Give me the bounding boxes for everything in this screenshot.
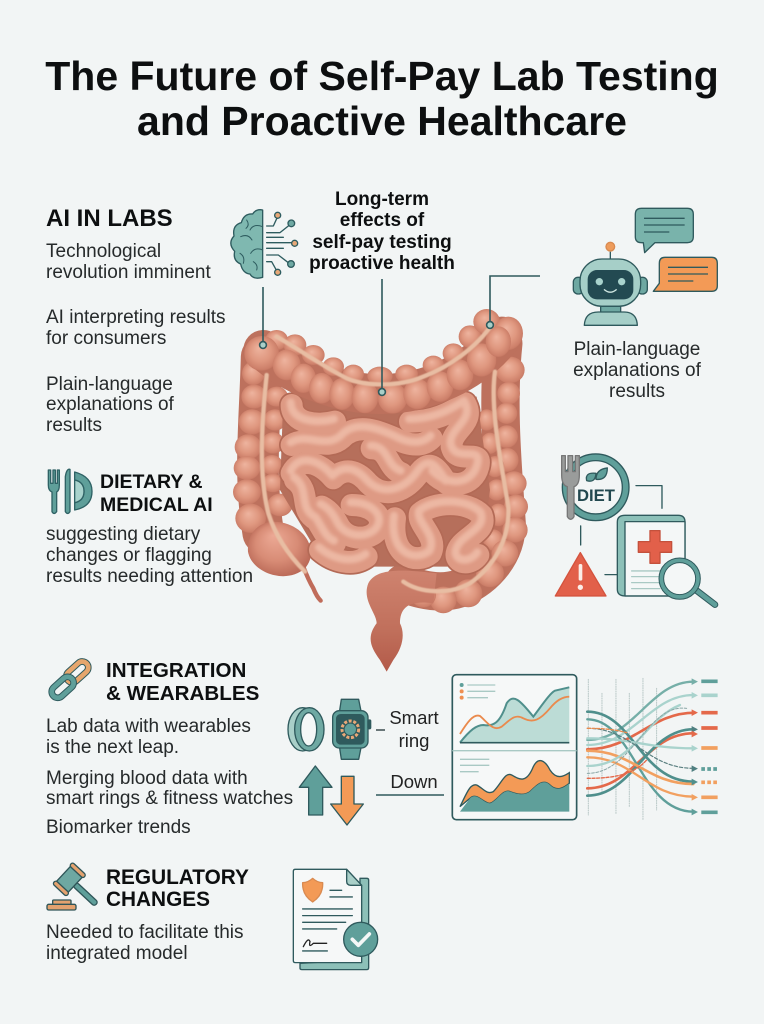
heading: dietary and medical AI: MEDICAL AI: [100, 494, 213, 516]
text: plain language: results: [46, 415, 102, 436]
ring: [288, 708, 324, 751]
text: regulatory body: Needed to facilitate this: [46, 922, 244, 943]
heading: AI in labs: AI IN LABS: [46, 205, 173, 232]
text: plain language: explanations of: [46, 394, 175, 415]
speech bubble teal: [635, 208, 693, 253]
chart panel: trend charts: [452, 675, 577, 820]
cecum and appendix: [248, 522, 321, 601]
callout lines with dots: [260, 276, 540, 395]
small intestine base mass: [280, 397, 490, 567]
label: down: Down: [390, 771, 438, 792]
top chart: [460, 683, 569, 743]
text: plain-language explanations: explanations of: [573, 360, 702, 381]
small intestine loops: [291, 401, 483, 562]
icon: document with shield and check: [293, 869, 378, 970]
text: plain language: Plain-language: [46, 374, 173, 395]
center heading: long-term effects: self-pay testing: [312, 232, 452, 253]
rectum: [367, 571, 437, 672]
text: plain-language explanations: results: [609, 381, 665, 402]
panel: integration and wearables: [46, 659, 293, 838]
label: smart ring: [376, 707, 439, 751]
panel: regulatory changes: [46, 862, 249, 964]
warning triangle: [555, 553, 606, 596]
text: lab data: Lab data with wearables: [46, 716, 251, 737]
illustration: intestines: [233, 309, 528, 672]
connector lines: [581, 486, 662, 575]
heading: regulatory changes: REGULATORY: [106, 866, 249, 889]
heading: integration and wearables: INTEGRATION: [106, 659, 246, 682]
text: dietary body: changes or flagging: [46, 545, 212, 566]
medical report: [617, 515, 685, 596]
title: and Proactive Healthcare: [137, 98, 627, 144]
magnifier: [661, 560, 715, 605]
label: smart ring: ring: [399, 730, 429, 751]
robot: [573, 242, 647, 325]
text: biomarker trends: Biomarker trends: [46, 817, 191, 838]
legend dashes: [701, 681, 718, 812]
icons: up and down arrows: [299, 766, 363, 825]
plate with diet label: [562, 454, 629, 521]
icon: fork knife plate: [48, 469, 92, 513]
text: merging blood data: smart rings & fitness watches: [46, 788, 293, 809]
panel: dietary and medical AI: [46, 469, 253, 587]
icon: brain circuit: [231, 210, 298, 278]
colon backing: [258, 343, 507, 591]
icon: robot with speech bubbles: [573, 208, 717, 325]
transverse colon: [244, 309, 523, 414]
text: regulatory body: integrated model: [46, 943, 188, 964]
label: smart ring: Smart: [389, 707, 439, 728]
heading: regulatory changes: CHANGES: [106, 888, 210, 911]
text: technological revolution: revolution imminent: [46, 262, 211, 283]
icon: diet, medical report, warning: [555, 454, 715, 605]
ascending and descending colon: [233, 357, 528, 613]
panel: AI in labs: [46, 205, 226, 436]
label: down: [376, 771, 444, 795]
dotted axes: [588, 678, 657, 820]
title: [45, 53, 719, 144]
taenia band: [262, 325, 508, 591]
text: dietary body: suggesting dietary: [46, 524, 200, 545]
text: plain-language explanations: Plain-language: [574, 339, 700, 360]
heading: integration and wearables: & WEARABLES: [106, 682, 259, 705]
text: AI interpreting: AI interpreting results: [46, 307, 226, 328]
plate with diet label: DIET: [577, 486, 615, 505]
chart: sankey flows: [587, 678, 718, 820]
speech bubble orange: [653, 257, 717, 291]
heading: dietary and medical AI: DIETARY &: [100, 471, 203, 493]
center heading: long-term effects: effects of: [340, 210, 425, 231]
text: AI interpreting: for consumers: [46, 328, 166, 349]
text: dietary body: results needing attention: [46, 566, 253, 587]
icon: chain link: [49, 659, 91, 700]
text: merging blood data: Merging blood data with: [46, 768, 248, 789]
text: technological revolution: Technological: [46, 241, 161, 262]
watch: [333, 699, 371, 759]
text: lab data: is the next leap.: [46, 737, 179, 758]
title: The Future of Self-Pay Lab Testing: [45, 53, 719, 99]
flow lines: [587, 682, 695, 812]
arrowheads: [692, 678, 698, 815]
icon: gavel: [47, 862, 106, 915]
icon: smart ring and watch: [288, 699, 371, 759]
center heading: long-term effects: proactive health: [309, 253, 455, 274]
bottom chart: [460, 759, 569, 812]
center heading: long-term effects: Long-term: [335, 189, 429, 210]
